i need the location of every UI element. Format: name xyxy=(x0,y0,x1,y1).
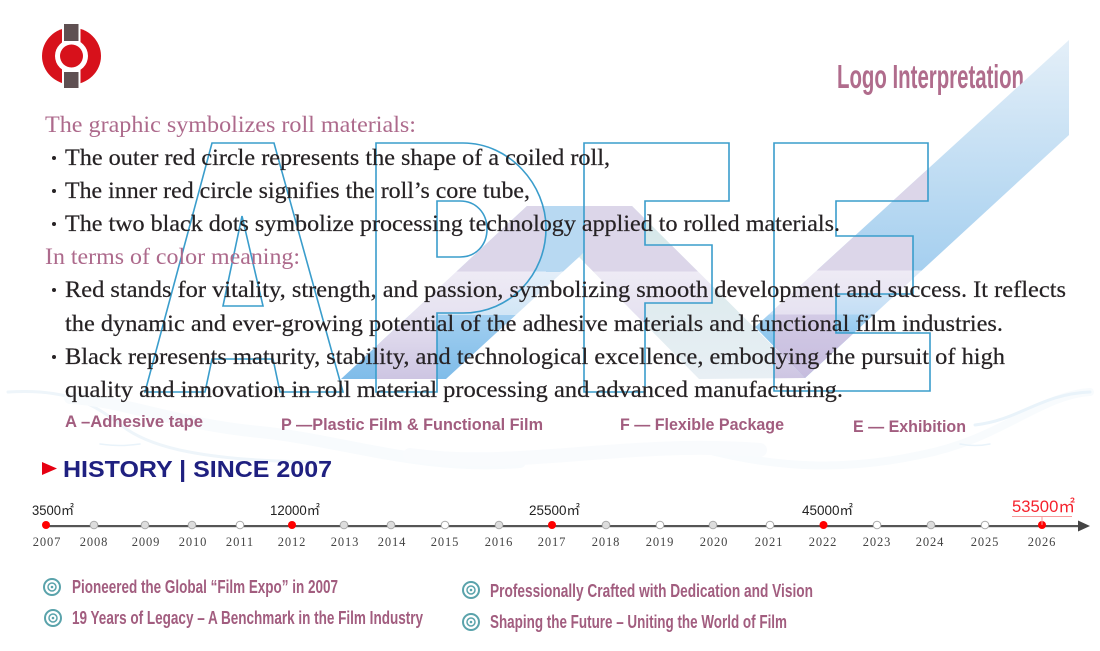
icon: red triangle xyxy=(42,462,57,475)
letter F xyxy=(584,143,729,392)
letter E xyxy=(774,143,930,391)
heading: graphic meaning: The graphic symbolizes roll materials: xyxy=(45,112,416,137)
year labels: 2021 xyxy=(755,535,783,549)
area labels xyxy=(32,503,853,518)
letter P xyxy=(376,143,546,392)
label P: P —Plastic Film & Functional Film xyxy=(281,416,543,434)
text block: logo explanation xyxy=(45,112,1066,402)
APFE legend labels xyxy=(65,413,966,436)
year labels: 2019 xyxy=(646,535,674,549)
year labels: 2020 xyxy=(700,535,728,549)
year labels: 2012 xyxy=(278,535,306,549)
highlight list xyxy=(44,577,813,632)
item: Film Expo: Pioneered the Global “Film Expo” in 2007 xyxy=(72,577,338,597)
year labels xyxy=(33,535,1056,549)
item: shaping: Shaping the Future – Uniting the World of Film xyxy=(490,612,787,632)
area labels: 12000㎡ xyxy=(270,503,320,518)
APFE outlined letters xyxy=(145,143,930,392)
background waves xyxy=(8,391,1090,465)
item: Film Expo xyxy=(44,577,338,597)
bullets xyxy=(52,156,56,359)
arrow ribbons behind letters xyxy=(341,40,1069,379)
letter A xyxy=(145,143,343,392)
area labels: 25500㎡ xyxy=(529,503,580,518)
year labels: 2023 xyxy=(863,535,891,549)
year labels: 2026 xyxy=(1028,535,1056,549)
logo icon: red roll circle xyxy=(42,22,101,90)
highlighted area 2026: 53500㎡ xyxy=(1012,497,1075,516)
highlighted area 2026 xyxy=(1012,497,1075,525)
year labels: 2018 xyxy=(592,535,620,549)
year labels: 2016 xyxy=(485,535,513,549)
line: black meaning: Black represents maturity, stability, and technological excellence, embodying the pursuit of high xyxy=(65,344,1006,369)
timeline dots xyxy=(42,521,1046,529)
line: black dots: The two black dots symbolize processing technology applied to rolled materials. xyxy=(65,211,840,236)
year labels: 2017 xyxy=(538,535,566,549)
year labels: 2024 xyxy=(916,535,944,549)
year labels: 2010 xyxy=(179,535,207,549)
line: red meaning 2: the dynamic and ever-growing potential of the adhesive materials and functional film industries. xyxy=(65,311,1003,336)
item: shaping xyxy=(463,612,787,632)
year labels: 2013 xyxy=(331,535,359,549)
item: 19 years: 19 Years of Legacy – A Benchmark in the Film Industry xyxy=(72,608,423,628)
area labels: 3500㎡ xyxy=(32,503,74,518)
area labels: 45000㎡ xyxy=(802,503,853,518)
year labels: 2007 xyxy=(33,535,61,549)
line: black meaning 2: quality and innovation in roll material processing and advanced manufacturing. xyxy=(65,377,843,402)
heading: color meaning: In terms of color meaning: xyxy=(45,244,300,269)
history heading xyxy=(42,456,332,482)
line: outer circle: The outer red circle represents the shape of a coiled roll, xyxy=(65,145,610,170)
item: crafted: Professionally Crafted with Dedication and Vision xyxy=(490,581,813,601)
year labels: 2008 xyxy=(80,535,108,549)
year labels: 2009 xyxy=(132,535,160,549)
year labels: 2022 xyxy=(809,535,837,549)
year labels: 2011 xyxy=(226,535,254,549)
timeline xyxy=(32,497,1090,549)
label A: A –Adhesive tape xyxy=(65,413,203,431)
year labels: 2015 xyxy=(431,535,459,549)
label F: F — Flexible Package xyxy=(620,416,784,434)
year labels: 2014 xyxy=(378,535,406,549)
heading text: HISTORY | SINCE 2007 xyxy=(63,456,332,482)
line: red meaning: Red stands for vitality, strength, and passion, symbolizing smooth development and success. It reflects xyxy=(65,277,1066,302)
axis arrow xyxy=(46,520,1090,532)
year labels: 2025 xyxy=(971,535,999,549)
line: inner circle: The inner red circle signifies the roll’s core tube, xyxy=(65,178,530,203)
label E: E — Exhibition xyxy=(853,418,966,436)
